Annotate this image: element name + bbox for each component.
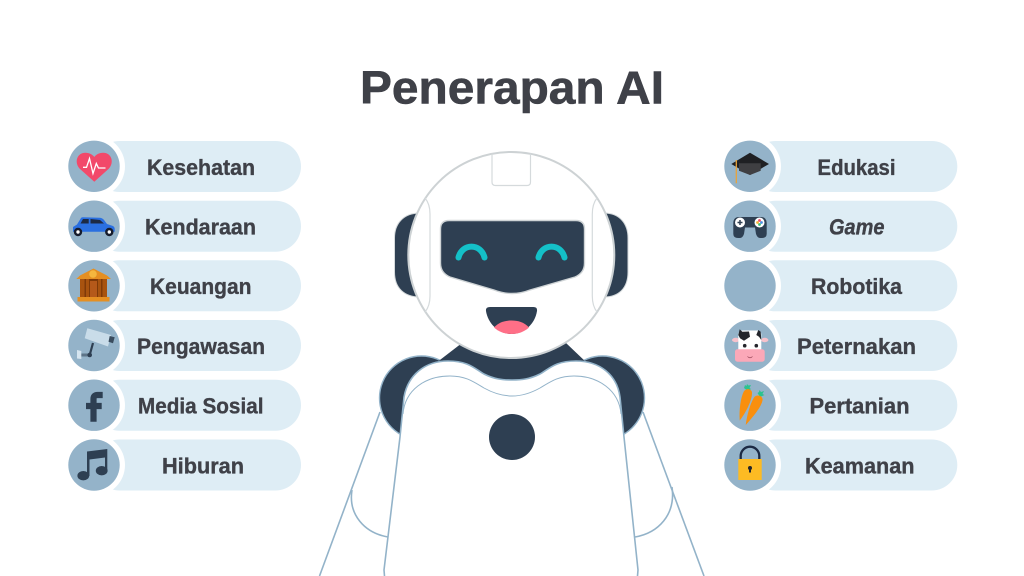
panel: Keuangan <box>63 255 301 317</box>
panel: Pertanian <box>719 374 957 436</box>
eyes <box>458 247 564 258</box>
torso inner line <box>403 376 621 414</box>
panel: Media Sosial <box>63 374 301 436</box>
label: Pertanian <box>810 394 910 419</box>
robot shoulders <box>380 356 644 440</box>
label: Kendaraan <box>145 214 256 240</box>
panel: Edukasi <box>719 135 957 197</box>
panel: Pengawasan <box>63 314 301 376</box>
icon: padlock <box>738 447 762 480</box>
panel: Game <box>719 195 957 257</box>
panel: Kesehatan <box>63 135 301 197</box>
label: Kesehatan <box>147 155 255 180</box>
label: Hiburan <box>162 453 244 478</box>
panel: Kendaraan <box>63 195 301 257</box>
label: Edukasi <box>818 155 896 180</box>
icon: CCTV camera <box>77 328 115 359</box>
chest button <box>489 414 535 460</box>
icon: gamepad <box>733 217 767 238</box>
icon: heart <box>77 153 112 182</box>
robot illustration <box>319 152 704 576</box>
label: Game <box>829 214 884 240</box>
icon: car <box>73 217 115 236</box>
robot neck <box>436 343 587 390</box>
visor <box>440 220 584 294</box>
robot head <box>408 152 614 358</box>
label: Media Sosial <box>138 394 264 419</box>
icon: music note <box>77 449 108 480</box>
head top panel <box>492 154 530 186</box>
title: Penerapan AI <box>360 62 664 114</box>
panel: Keamanan <box>719 434 957 496</box>
icon: cow <box>732 329 768 362</box>
panel: Peternakan <box>719 314 957 376</box>
label: Pengawasan <box>137 334 265 359</box>
icon: bank <box>76 268 111 302</box>
label: Peternakan <box>797 334 916 359</box>
label: Keuangan <box>150 274 252 299</box>
icon: carrots <box>740 384 764 425</box>
panel: Robotika <box>719 255 957 317</box>
label: Robotika <box>811 274 903 299</box>
robot ears <box>394 213 628 297</box>
head side panels <box>425 198 597 312</box>
icon: empty circle <box>724 260 776 311</box>
tongue <box>494 320 529 334</box>
robot arms <box>319 412 704 576</box>
icon: facebook <box>86 395 103 422</box>
robot torso <box>384 361 638 576</box>
panel: Hiburan <box>63 434 301 496</box>
label: Keamanan <box>805 453 914 478</box>
icon: graduation cap <box>731 153 769 183</box>
mouth <box>486 307 537 334</box>
